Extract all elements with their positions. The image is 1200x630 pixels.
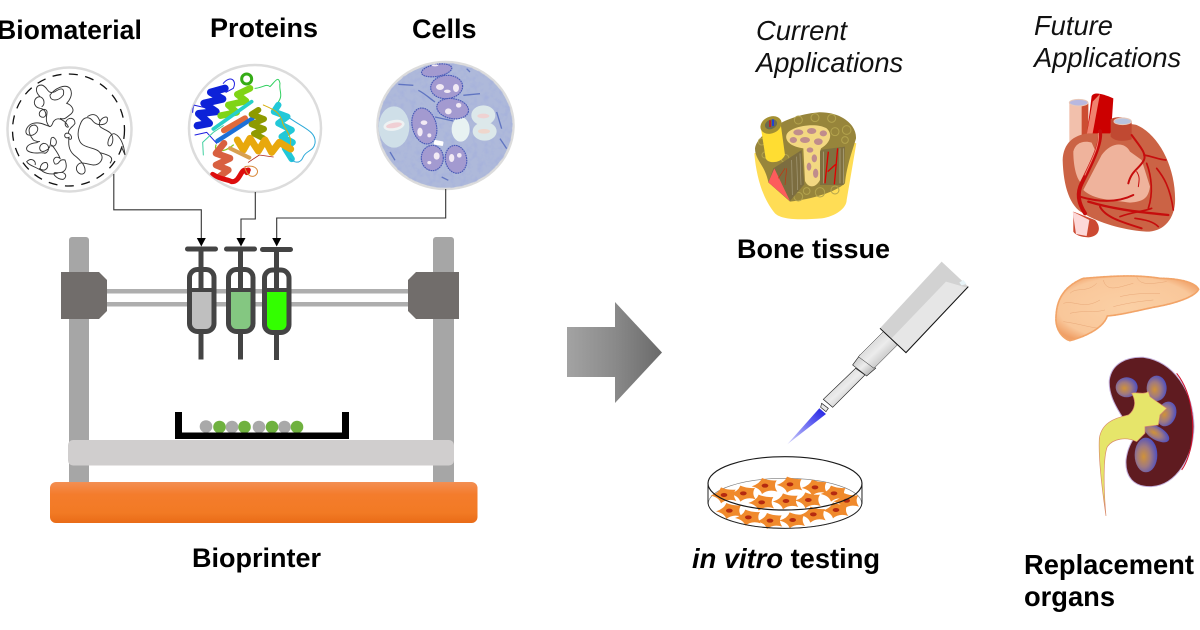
left post: [69, 237, 89, 487]
syringe: cells: [260, 247, 293, 360]
connector: proteins to syringe: [236, 192, 255, 246]
right post: [433, 237, 454, 487]
print bed: [68, 440, 454, 466]
heading: Future Applications: Future: [1034, 10, 1113, 41]
bioprinter frame: [50, 237, 478, 523]
heading: Biomaterial: Biomaterial: [0, 15, 142, 45]
block arrow: [567, 302, 662, 403]
label: Replacement organs: Replacement: [1024, 549, 1194, 580]
orange base: [50, 482, 478, 523]
print dish: [175, 412, 349, 439]
syringe: biomaterial: [185, 246, 218, 360]
icon: kidney: [1099, 357, 1194, 516]
label: Replacement organs: organs: [1024, 581, 1115, 612]
connector: biomaterial to syringe: [114, 174, 206, 246]
circle: biomaterial polymer scribble: [8, 68, 132, 192]
right carriage block: [408, 272, 459, 319]
heading: Current Applications: Current: [756, 15, 848, 46]
heading: Current Applications: Applications: [754, 47, 904, 78]
icon: heart: [1063, 94, 1175, 237]
circle: cells micrograph: [377, 62, 514, 189]
heading: Proteins: Proteins: [210, 13, 318, 43]
syringe: proteins: [224, 246, 257, 360]
icon: bone tissue cross-section: [754, 112, 856, 219]
label: Bioprinter: Bioprinter: [192, 543, 321, 573]
printed beads: [200, 420, 303, 433]
label: Bone tissue: Bone tissue: [737, 234, 890, 264]
guide rails: [105, 289, 410, 306]
icon: petri dish with cells: [708, 457, 862, 529]
left carriage block: [61, 272, 107, 319]
icon: pipette nozzle dispensing: [787, 262, 968, 444]
heading: Future Applications: Applications: [1032, 42, 1182, 73]
icon: pancreas: [1056, 276, 1199, 341]
connector: cells to syringe: [272, 189, 446, 246]
circle: protein ribbon structure: [189, 65, 321, 192]
heading: Cells: Cells: [412, 14, 477, 44]
pale vacuole cells: [379, 105, 497, 148]
label: in vitro testing: in vitro testing: [692, 543, 880, 574]
